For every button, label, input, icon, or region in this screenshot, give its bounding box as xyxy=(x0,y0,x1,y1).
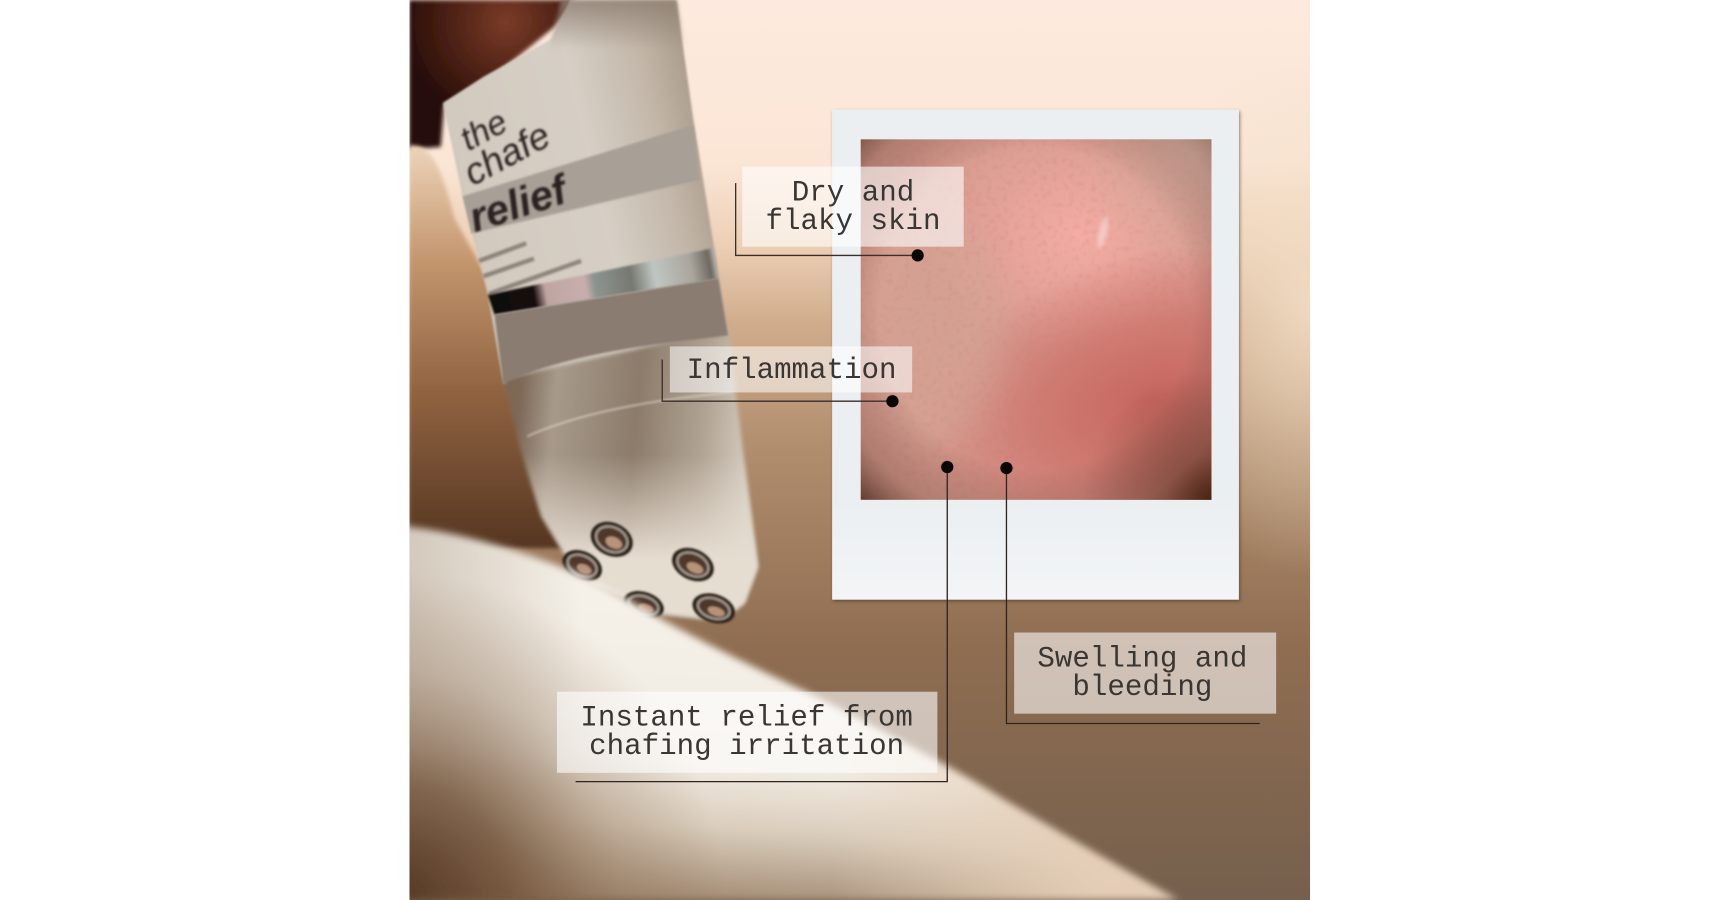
tube silver strip xyxy=(488,248,718,315)
tube brand text: chafe xyxy=(457,114,557,193)
foreground thigh xyxy=(373,515,1206,900)
tube roller tip xyxy=(526,464,760,622)
tube top band xyxy=(463,125,699,233)
callout: swelling and bleeding: Swelling and xyxy=(1037,643,1247,676)
callout: swelling and bleeding: bleeding xyxy=(1072,671,1212,704)
roller balls xyxy=(560,520,736,625)
tube brand text xyxy=(460,114,566,234)
callout: dry and flaky skin: Dry and xyxy=(792,177,914,210)
tube top shading xyxy=(551,0,684,44)
skin photo xyxy=(860,139,1212,500)
product tube xyxy=(443,0,758,629)
arm xyxy=(410,142,562,551)
callout: inflammation xyxy=(662,346,912,407)
tube body xyxy=(443,0,728,384)
photo scene background xyxy=(410,0,1310,900)
polaroid frame xyxy=(832,110,1239,600)
tube brand text: the xyxy=(454,103,514,158)
callout: swelling and bleeding xyxy=(1000,462,1276,724)
callout: dry and flaky skin xyxy=(736,167,964,262)
dark hand area xyxy=(409,0,576,149)
tube small print xyxy=(479,243,581,294)
callout: instant relief xyxy=(557,461,953,782)
tube lower section xyxy=(503,329,758,620)
callout: instant relief: Instant relief from xyxy=(580,702,913,735)
tube brand text: relief xyxy=(463,164,576,241)
tube lower band xyxy=(494,278,728,384)
infographic canvas xyxy=(410,0,1310,900)
callout: dry and flaky skin: flaky skin xyxy=(765,205,940,238)
backdrop gradient xyxy=(409,0,1310,900)
tube shoulder line xyxy=(527,392,732,436)
backdrop light on right xyxy=(1239,233,1310,552)
callout: inflammation: Inflammation xyxy=(687,354,897,387)
callout: instant relief: chafing irritation xyxy=(589,730,904,763)
